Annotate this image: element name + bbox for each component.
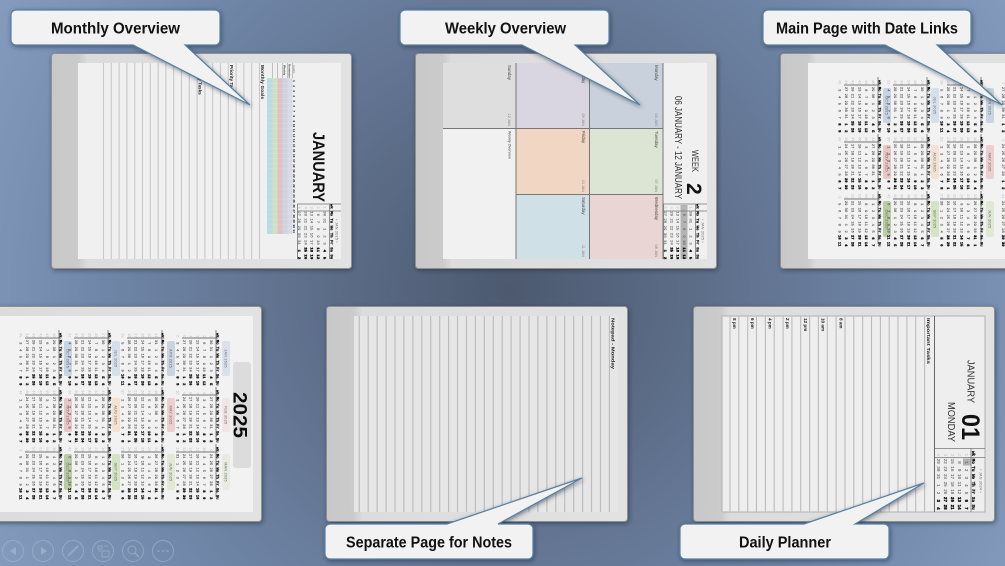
- calendar grids: 31 28 29 30 31 1 2 3: [919, 137, 923, 189]
- calendar grids: 1 29 30 31 1 2 3 4: [843, 196, 847, 246]
- month chips: JAN 2025: [224, 349, 228, 368]
- calendar grids: wk Mo Tu We Th Fr Sa Su: [58, 447, 62, 500]
- calendar grids: 28 7 8 9 10 11 12 13: [912, 80, 916, 132]
- month chips: AUG 2025: [932, 152, 936, 172]
- calendar grids: 51 15 16 17 18 19 20 21: [37, 447, 41, 499]
- calendar grids: 44 27 28 29 30 31 1 2: [870, 137, 874, 189]
- icon: zoom: [122, 540, 144, 562]
- callout: monthly overview: Monthly Overview: [51, 20, 181, 38]
- calendar grids: 5 27 28 29 30 31 1 2: [208, 392, 212, 442]
- icon: more: [152, 540, 174, 562]
- calendar grids: 40 29 30 1 2 3 4 5: [73, 447, 77, 499]
- calendar grids: [17, 333, 219, 502]
- calendar grids: 2 6 7 8 9 10 11 12: [201, 335, 205, 385]
- calendar grids: 23 2 3 4 5 6 7 8: [965, 194, 969, 246]
- calendar grids: 18 28 29 30 1 2 3 4: [972, 137, 976, 189]
- icon: slides: [92, 540, 114, 562]
- calendar grids: 49 1 2 3 4 5 6 7: [17, 390, 21, 442]
- calendar grids: 15 7 8 9 10 11 12 13: [146, 333, 150, 385]
- section labels: [198, 65, 265, 99]
- calendar grids: 41 6 7 8 9 10 11 12: [66, 447, 70, 499]
- calendar grids: 9 24 25 26 27 28 1 2: [181, 392, 185, 442]
- calendar grids: 19 5 6 7 8 9 10 11: [965, 137, 969, 189]
- calendar grids: 25 16 17 18 19 20 21 22: [133, 447, 137, 499]
- calendar grids: 9 24 25 26 27 28 1 2: [1000, 137, 1004, 190]
- calendar grids: 48 24 25 26 27 28 29 30: [24, 390, 28, 442]
- calendar grids: 37 8 9 10 11 12 13 14: [93, 447, 97, 499]
- calendar grids: 33 11 12 13 14 15 16 17: [905, 137, 909, 189]
- month chips: SEP 2025: [114, 463, 118, 481]
- calendar grids: 16 14 15 16 17 18 19 20: [139, 333, 143, 385]
- calendar grids: 27 30 1 2 3 4 5 6: [100, 333, 104, 385]
- calendar grids: 19 5 6 7 8 9 10 11: [938, 80, 942, 132]
- month chips: [883, 88, 994, 237]
- calendar grids: 43 20 21 22 23 24 25 26: [850, 80, 854, 132]
- day labels: 12 JAN: [507, 114, 511, 126]
- calendar grids: 31 28 29 30 31 1 2 3: [100, 390, 104, 442]
- calendar grids: 9 24 25 26 27 28 1 2: [208, 449, 212, 499]
- time labels: 10 am: [820, 318, 826, 331]
- calendar grids: 51 15 16 17 18 19 20 21: [856, 194, 860, 246]
- calendar grids: 41 6 7 8 9 10 11 12: [885, 194, 889, 246]
- calendar grids: 22 26 27 28 29 30 31 1: [153, 447, 157, 499]
- day labels: 08 JAN: [654, 245, 658, 257]
- calendar rules: [844, 77, 983, 244]
- calendar grids: 30 21 22 23 24 25 26 27: [899, 80, 903, 132]
- mini calendar: ‹ JAN 2025 ›: [334, 219, 338, 243]
- mini calendar: 5 27 28 29 30 31 1 2: [296, 206, 300, 259]
- habit grid: 1 2 3 4 5 6 7 8 9 10 11 12 13 14 15 16 17 18 19 20 21 22 23 24 25 26 27 28 29 30 31: [292, 78, 295, 233]
- calendar grids: 39 22 23 24 25 26 27 28: [80, 447, 84, 499]
- calendar grids: 5 27 28 29 30 31 1 2: [1000, 80, 1004, 133]
- habit grid: Habits: [292, 65, 296, 74]
- mini calendar: 2 6 7 8 9 10 11 12: [315, 206, 319, 259]
- calendar grids: wk Mo Tu We Th Fr Sa Su: [978, 80, 984, 133]
- mini calendar: [296, 204, 341, 262]
- panel: monthly overview tablet: [52, 54, 352, 268]
- calendar grids: 27 30 1 2 3 4 5 6: [938, 194, 942, 246]
- mini calendar: wk Mo Tu We Th Fr Sa Su: [970, 451, 975, 510]
- calendar grids: 41 6 7 8 9 10 11 12: [44, 333, 48, 385]
- calendar grids: 10 3 4 5 6 7 8 9: [201, 447, 205, 499]
- calendar grids: 12 17 18 19 20 21 22 23: [188, 447, 192, 499]
- calendar grids: 38 15 16 17 18 19 20 21: [86, 447, 90, 499]
- calendar grids: 48 24 25 26 27 28 29 30: [843, 137, 847, 189]
- ruled note lines: [104, 63, 260, 259]
- time labels: 2 pm: [785, 318, 790, 329]
- calendar grids: wk Mo Tu We Th Fr Sa Su: [876, 80, 882, 133]
- calendar grids: 20 12 13 14 15 16 17 18: [958, 137, 962, 189]
- calendar grids: 38 15 16 17 18 19 20 21: [905, 194, 909, 246]
- callout: daily planner: Daily Planner: [739, 534, 831, 552]
- calendar grids: 47 17 18 19 20 21 22 23: [850, 137, 854, 189]
- date header: MONDAY: [945, 402, 956, 442]
- calendar grids: [836, 80, 1004, 249]
- calendar grids: 27 30 1 2 3 4 5 6: [119, 447, 123, 499]
- calendar grids: 52 22 23 24 25 26 27 28: [850, 194, 854, 246]
- calendar grids: 18 28 29 30 1 2 3 4: [126, 333, 130, 385]
- calendar grids: 36 1 2 3 4 5 6 7: [100, 447, 104, 499]
- day labels: Friday: [581, 131, 586, 144]
- calendar grids: 8 17 18 19 20 21 22 23: [188, 392, 192, 442]
- mini calendar: ‹ JAN 2025 ›: [700, 219, 704, 243]
- month chips: AUG 2025: [114, 405, 118, 425]
- calendar grids: 7 10 11 12 13 14 15 16: [194, 392, 198, 442]
- calendar grids: 6 3 4 5 6 7 8 9: [201, 392, 205, 442]
- month chips: NOV 2025: [884, 152, 888, 172]
- month chips: JUL 2025: [932, 97, 936, 114]
- calendar grids: wk Mo Tu We Th Fr Sa Su: [160, 390, 164, 443]
- calendar grids: 19 5 6 7 8 9 10 11: [146, 390, 150, 442]
- calendar grids: 42 13 14 15 16 17 18 19: [856, 80, 860, 132]
- calendar grids: 26 23 24 25 26 27 28 29: [945, 194, 949, 246]
- year chip: 2025: [228, 392, 250, 438]
- calendar grids: 26 23 24 25 26 27 28 29: [126, 447, 130, 499]
- month chips: FEB 2025: [224, 406, 228, 424]
- callout: weekly overview: [400, 10, 640, 105]
- mini calendar: wk Mo Tu We Th Fr Sa Su: [328, 204, 334, 260]
- section labels: Priority Tasks: [229, 65, 234, 95]
- callout: separate page for notes: [325, 478, 582, 559]
- time labels: 6 pm: [750, 318, 755, 329]
- calendar grids: 14 31 1 2 3 4 5 6: [174, 447, 178, 499]
- calendar grids: 16 14 15 16 17 18 19 20: [958, 80, 962, 132]
- month chips: JUN 2025: [168, 463, 172, 481]
- mini calendar: 3 13 14 15 16 17 18 19: [309, 206, 313, 259]
- mini calendar: [935, 448, 985, 512]
- calendar grids: 42 13 14 15 16 17 18 19: [37, 333, 41, 385]
- calendar grids: 41 6 7 8 9 10 11 12: [863, 80, 867, 132]
- calendar grids: wk Mo Tu We Th Fr Sa Su: [58, 333, 62, 386]
- calendar grids: 2 5 6 7 8 9 10 11: [17, 449, 21, 499]
- calendar grids: 44 27 28 29 30 31 1 2: [24, 333, 28, 385]
- day labels: 06 JAN: [654, 114, 658, 126]
- day cells: [443, 63, 663, 259]
- mini calendar: 2 6 7 8 9 10 11 12: [681, 206, 685, 259]
- ruled note lines: [359, 316, 609, 512]
- calendar grids: 4 20 21 22 23 24 25 26: [188, 335, 192, 385]
- year chip: [228, 362, 251, 468]
- month chips: DEC 2025: [884, 209, 888, 229]
- time labels: 12 pm: [803, 318, 808, 331]
- calendar grids: 17 21 22 23 24 25 26 27: [952, 80, 956, 132]
- calendar grids: wk Mo Tu We Th Fr Sa Su: [214, 447, 220, 500]
- calendar grids: 29 14 15 16 17 18 19 20: [905, 80, 909, 132]
- calendar grids: wk Mo Tu We Th Fr Sa Su: [926, 80, 930, 133]
- mini calendar: 4 20 21 22 23 24 25 26: [302, 206, 306, 259]
- callout: daily planner: [680, 483, 924, 559]
- month chips: DEC 2025: [66, 462, 70, 482]
- panel: main page tablet (top right): [780, 54, 1005, 268]
- calendar grids: 45 3 4 5 6 7 8 9: [863, 137, 867, 189]
- calendar grids: 22 26 27 28 29 30 31 1: [945, 137, 949, 189]
- day labels: Thursday: [581, 65, 586, 84]
- calendar grids: wk Mo Tu We Th Fr Sa Su: [876, 194, 882, 247]
- week header: [672, 96, 705, 199]
- month chips: NOV 2025: [66, 405, 70, 425]
- mini calendar: 3 15 16 17 18 19 20 21: [949, 454, 954, 510]
- panel: weekly overview tablet: [416, 54, 716, 268]
- month chips: APR 2025: [988, 96, 992, 115]
- time labels: 4 pm: [768, 318, 772, 329]
- month chips: OCT 2025: [884, 96, 888, 115]
- calendar grids: 32 4 5 6 7 8 9 10: [66, 333, 70, 385]
- calendar grids: 33 11 12 13 14 15 16 17: [86, 390, 90, 442]
- calendar grids: 47 17 18 19 20 21 22 23: [31, 390, 35, 442]
- panel: daily planner tablet: [694, 306, 994, 522]
- mini calendar: 5 29 30 31 1 2 3 4: [935, 454, 940, 510]
- week header: 06 JANUARY - 12 JANUARY: [672, 96, 683, 199]
- calendar grids: 25 16 17 18 19 20 21 22: [952, 194, 956, 246]
- day labels: 11 JAN: [581, 245, 585, 257]
- date header: [945, 360, 984, 442]
- week header: WEEK: [690, 150, 700, 172]
- month chips: APR 2025: [168, 349, 172, 368]
- mini calendar: 3 13 14 15 16 17 18 19: [675, 206, 679, 259]
- calendar grids: 10 3 4 5 6 7 8 9: [174, 390, 178, 442]
- calendar grids: 31 28 29 30 31 1 2 3: [73, 333, 77, 385]
- calendar grids: 23 2 3 4 5 6 7 8: [146, 447, 150, 499]
- calendar grids: 6 3 4 5 6 7 8 9: [174, 335, 178, 385]
- calendar grids: 29 14 15 16 17 18 19 20: [86, 333, 90, 385]
- month chips: MAY 2025: [988, 153, 992, 171]
- time labels: 8 am: [838, 318, 844, 328]
- calendar grids: 32 4 5 6 7 8 9 10: [93, 390, 97, 442]
- mini calendar: wk Mo Tu We Th Fr Sa Su: [694, 204, 700, 260]
- calendar grids: 22 26 27 28 29 30 31 1: [972, 194, 976, 246]
- callout: monthly overview: [11, 10, 250, 105]
- panel: year page tablet (bottom left): [0, 306, 262, 522]
- day labels: Weekly Overview: [508, 131, 512, 159]
- habit grid: Reminder: [288, 64, 292, 79]
- calendar grids: 36 1 2 3 4 5 6 7: [885, 137, 889, 189]
- mini calendar: 1 30 31 1 2 3 4 5: [687, 206, 691, 259]
- time labels: 8 pm: [732, 318, 737, 329]
- calendar grids: 40 29 30 1 2 3 4 5: [51, 333, 55, 385]
- day labels: Monday: [654, 65, 659, 81]
- day labels: 09 JAN: [581, 114, 585, 126]
- calendar grids: wk Mo Tu We Th Fr Sa Su: [214, 333, 220, 386]
- calendar grids: wk Mo Tu We Th Fr Sa Su: [876, 137, 882, 190]
- calendar grids: 23 2 3 4 5 6 7 8: [119, 390, 123, 442]
- icon: pen: [62, 540, 84, 562]
- calendar grids: 11 10 11 12 13 14 15 16: [194, 447, 198, 499]
- page label: Notepad - Monday: [610, 318, 616, 370]
- calendar grids: wk Mo Tu We Th Fr Sa Su: [106, 333, 112, 386]
- week header: 2: [682, 183, 705, 195]
- mini calendar: [662, 204, 707, 262]
- day labels: Sunday: [507, 65, 512, 81]
- calendar grids: 44 27 28 29 30 31 1 2: [843, 80, 847, 132]
- calendar grids: wk Mo Tu We Th Fr Sa Su: [978, 137, 984, 190]
- calendar grids: 43 20 21 22 23 24 25 26: [31, 333, 35, 385]
- callout: main page with date links: Main Page with Date Links: [776, 20, 958, 38]
- callout: weekly overview: Weekly Overview: [445, 20, 567, 38]
- calendar grids: 32 4 5 6 7 8 9 10: [912, 137, 916, 189]
- month chips: SEP 2025: [932, 210, 936, 228]
- calendar grids: 18 28 29 30 1 2 3 4: [153, 390, 157, 442]
- calendar grids: wk Mo Tu We Th Fr Sa Su: [106, 447, 112, 500]
- calendar grids: 27 30 1 2 3 4 5 6: [919, 80, 923, 132]
- schedule lines: [730, 316, 925, 512]
- calendar grids: 23 2 3 4 5 6 7 8: [938, 137, 942, 189]
- month chips: JUL 2025: [114, 350, 118, 367]
- calendar grids: 34 18 19 20 21 22 23 24: [80, 390, 84, 442]
- calendar grids: 3 13 14 15 16 17 18 19: [194, 335, 198, 385]
- day labels: 10 JAN: [581, 180, 585, 192]
- mini calendar: 1 1 2 3 4 5 6 7: [963, 454, 968, 510]
- calendar grids: 36 1 2 3 4 5 6 7: [66, 390, 70, 442]
- calendar grids: 50 8 9 10 11 12 13 14: [44, 447, 48, 499]
- calendar grids: wk Mo Tu We Th Fr Sa Su: [106, 390, 112, 443]
- calendar grids: 40 29 30 1 2 3 4 5: [870, 80, 874, 132]
- calendar grids: 13 24 25 26 27 28 29 30: [1000, 194, 1004, 247]
- calendar grids: 39 22 23 24 25 26 27 28: [899, 194, 903, 246]
- calendar grids: 49 1 2 3 4 5 6 7: [51, 447, 55, 499]
- calendar grids: 35 25 26 27 28 29 30 31: [892, 137, 896, 189]
- calendar grids: 45 3 4 5 6 7 8 9: [17, 333, 21, 385]
- mini calendar: 4 22 23 24 25 26 27 28: [942, 454, 947, 510]
- calendar grids: 17 21 22 23 24 25 26 27: [133, 333, 137, 385]
- habit grid: Weekly: [282, 65, 286, 76]
- month chips: OCT 2025: [66, 349, 70, 368]
- calendar rules: [25, 330, 218, 497]
- mini calendar: ‹ JAN 2024 ›: [978, 469, 982, 493]
- calendar grids: 49 1 2 3 4 5 6 7: [870, 194, 874, 246]
- calendar grids: 18 28 29 30 1 2 3 4: [945, 80, 949, 132]
- calendar grids: 24 9 10 11 12 13 14 15: [958, 194, 962, 246]
- day labels: Saturday: [581, 197, 586, 215]
- calendar grids: 31 28 29 30 31 1 2 3: [892, 80, 896, 132]
- calendar grids: 19 5 6 7 8 9 10 11: [119, 333, 123, 385]
- calendar grids: 1 29 30 31 1 2 3 4: [24, 449, 28, 499]
- calendar grids: 34 18 19 20 21 22 23 24: [899, 137, 903, 189]
- calendar grids: 28 7 8 9 10 11 12 13: [93, 333, 97, 385]
- calendar grids: 14 31 1 2 3 4 5 6: [153, 333, 157, 385]
- icon: next: [32, 540, 54, 562]
- calendar grids: 45 3 4 5 6 7 8 9: [836, 80, 840, 132]
- calendar grids: 45 3 4 5 6 7 8 9: [44, 390, 48, 442]
- mini calendar: 2 8 9 10 11 12 13 14: [956, 454, 961, 510]
- calendar grids: 36 1 2 3 4 5 6 7: [919, 194, 923, 246]
- calendar grids: 46 10 11 12 13 14 15 16: [856, 137, 860, 189]
- mini calendar: 5 27 28 29 30 31 1 2: [662, 206, 666, 259]
- time labels: [732, 318, 931, 365]
- icon: previous: [2, 540, 24, 562]
- calendar grids: 21 19 20 21 22 23 24 25: [952, 137, 956, 189]
- calendar grids: 22 26 27 28 29 30 31 1: [126, 390, 130, 442]
- habit grid: [267, 63, 296, 234]
- day labels: Tuesday: [654, 131, 659, 148]
- calendar grids: wk Mo Tu We Th Fr Sa Su: [926, 137, 930, 190]
- month title: JANUARY: [309, 132, 327, 202]
- time labels: Important Tasks: [926, 318, 931, 365]
- calendar grids: wk Mo Tu We Th Fr Sa Su: [926, 194, 930, 247]
- calendar grids: 24 9 10 11 12 13 14 15: [139, 447, 143, 499]
- calendar grids: 46 10 11 12 13 14 15 16: [37, 390, 41, 442]
- day labels: 07 JAN: [654, 180, 658, 192]
- calendar grids: 2 5 6 7 8 9 10 11: [836, 196, 840, 246]
- calendar grids: 32 4 5 6 7 8 9 10: [885, 80, 889, 132]
- date header: JANUARY: [964, 360, 976, 403]
- calendar grids: 5 27 28 29 30 31 1 2: [181, 335, 185, 385]
- calendar grids: 44 27 28 29 30 31 1 2: [51, 390, 55, 442]
- calendar grids: 37 8 9 10 11 12 13 14: [912, 194, 916, 246]
- section labels: Monthly Goals: [260, 65, 265, 99]
- mini calendar: 1 30 31 1 2 3 4 5: [321, 206, 325, 259]
- slideshow toolbar: [2, 540, 174, 562]
- month chips: MAY 2025: [168, 406, 172, 424]
- calendar grids: 50 8 9 10 11 12 13 14: [863, 194, 867, 246]
- day labels: Wednesday: [654, 197, 659, 221]
- calendar grids: 30 21 22 23 24 25 26 27: [80, 333, 84, 385]
- callout: separate page for notes: Separate Page for Notes: [346, 534, 512, 552]
- calendar grids: wk Mo Tu We Th Fr Sa Su: [214, 390, 220, 443]
- calendar grids: wk Mo Tu We Th Fr Sa Su: [58, 390, 62, 443]
- calendar grids: 52 22 23 24 25 26 27 28: [31, 447, 35, 499]
- month chips: [64, 341, 230, 490]
- calendar grids: 15 7 8 9 10 11 12 13: [965, 80, 969, 132]
- calendar grids: 35 25 26 27 28 29 30 31: [73, 390, 77, 442]
- calendar grids: 13 24 25 26 27 28 29 30: [181, 447, 185, 499]
- month chips: MAR 2025: [224, 462, 228, 482]
- day labels: [507, 65, 659, 257]
- calendar grids: 1 30 31 1 2 3 4 5: [208, 335, 212, 385]
- section labels: Weekly Tasks: [198, 65, 202, 95]
- calendar grids: wk Mo Tu We Th Fr Sa Su: [160, 333, 164, 386]
- callout: main page with date links: [763, 10, 1002, 105]
- calendar grids: 40 29 30 1 2 3 4 5: [892, 194, 896, 246]
- mini calendar: 4 20 21 22 23 24 25 26: [668, 206, 672, 259]
- calendar grids: wk Mo Tu We Th Fr Sa Su: [978, 194, 984, 247]
- date header: 01: [956, 414, 984, 440]
- calendar grids: 49 1 2 3 4 5 6 7: [836, 137, 840, 189]
- month chips: JUN 2025: [988, 210, 992, 228]
- calendar grids: wk Mo Tu We Th Fr Sa Su: [160, 447, 164, 500]
- calendar grids: 20 12 13 14 15 16 17 18: [139, 390, 143, 442]
- calendar grids: 14 31 1 2 3 4 5 6: [972, 80, 976, 132]
- calendar grids: 21 19 20 21 22 23 24 25: [133, 390, 137, 442]
- panel: notes page tablet: [326, 306, 628, 522]
